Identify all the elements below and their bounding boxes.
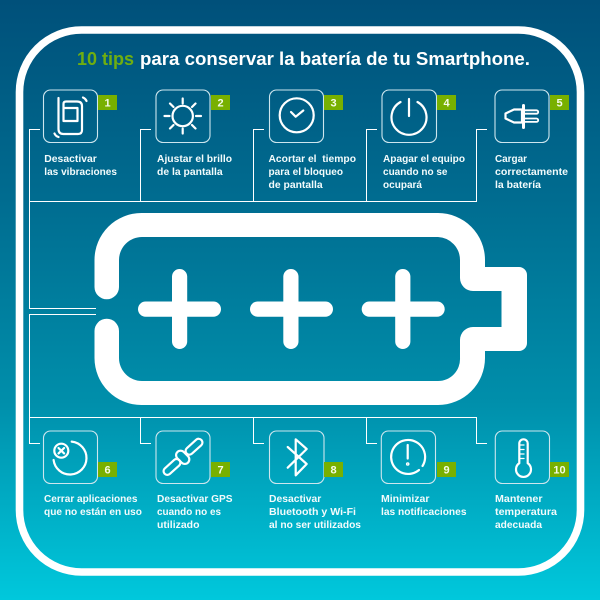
- tip 10: temperature: temperatura: [495, 506, 557, 518]
- tip 3: screen lock time: para el bloqueo: [268, 166, 343, 178]
- tip 10: temperature: 10: [553, 464, 566, 476]
- tip 3: screen lock time: de pantalla: [268, 179, 323, 191]
- tip 8: Bluetooth and Wi-Fi: Desactivar: [269, 493, 321, 505]
- icon: sun: [164, 98, 201, 134]
- tip 5: charging: correctamente: [495, 166, 568, 178]
- tip 5: charging: [495, 90, 569, 191]
- icon: plug: [506, 106, 538, 128]
- tip 2: brightness: de la pantalla: [157, 166, 223, 178]
- icon: chain link: [162, 437, 204, 476]
- tip 7: GPS: Desactivar GPS: [157, 493, 232, 505]
- tip 2: brightness: 2: [217, 98, 224, 110]
- tip 9: notifications: Minimizar: [381, 493, 430, 505]
- tip 2: brightness: Ajustar el brillo: [157, 153, 232, 165]
- icon: clock: [280, 98, 314, 132]
- icon: vibrating phone: [54, 98, 86, 137]
- tip 4: power off: Apagar el equipo: [383, 153, 465, 165]
- connector lines: top row: [30, 130, 487, 308]
- tip 9: notifications: [381, 431, 467, 518]
- tip 7: GPS: utilizado: [157, 519, 200, 531]
- tip 1: vibrations: las vibraciones: [44, 166, 117, 178]
- tip 7: GPS: [156, 431, 232, 531]
- tip 7: GPS: 7: [217, 464, 224, 476]
- tip 9: notifications: las notificaciones: [381, 506, 467, 518]
- tip 4: power off: ocupará: [383, 179, 422, 191]
- tip 3: screen lock time: [268, 90, 356, 191]
- tip 10: temperature: [495, 431, 569, 531]
- tip 6: close apps: Cerrar aplicaciones: [44, 493, 138, 505]
- tip 5: charging: la batería: [495, 179, 541, 191]
- tip 8: Bluetooth and Wi-Fi: al no ser utilizados: [269, 519, 361, 531]
- tip 8: Bluetooth and Wi-Fi: [269, 431, 361, 531]
- tip 5: charging: 5: [556, 98, 563, 110]
- tip 6: close apps: [44, 431, 142, 518]
- battery plus signs: [138, 269, 445, 349]
- icon: circle with x: [54, 442, 86, 475]
- tip 6: close apps: que no están en uso: [44, 506, 142, 518]
- tip 10: temperature: adecuada: [495, 519, 542, 531]
- tip 3: screen lock time: Acortar el tiempo: [268, 153, 356, 165]
- battery outline: [94, 213, 527, 405]
- tip 1: vibrations: [44, 90, 117, 178]
- tip 1: vibrations: Desactivar: [44, 153, 97, 165]
- tip 4: power off: [382, 90, 465, 191]
- tip 3: screen lock time: 3: [330, 98, 337, 110]
- tip 8: Bluetooth and Wi-Fi: 8: [330, 464, 337, 476]
- tip 2: brightness: [156, 90, 232, 178]
- tip 4: power off: cuando no se: [383, 166, 448, 178]
- tip 4: power off: 4: [443, 98, 450, 110]
- tip 10: temperature: Mantener: [495, 493, 542, 505]
- tip 1: vibrations: 1: [104, 98, 111, 110]
- icon: thermometer: [516, 439, 531, 477]
- icon: bluetooth: [288, 439, 307, 475]
- icon: exclamation circle: [391, 440, 425, 474]
- title: para conservar la batería de tu Smartphone.: [140, 48, 530, 69]
- icon: power: [392, 99, 427, 135]
- tip 5: charging: Cargar: [495, 153, 527, 165]
- tip 7: GPS: cuando no es: [157, 506, 221, 518]
- connector lines: bottom row: [30, 314, 487, 444]
- tip 9: notifications: 9: [443, 464, 450, 476]
- tip 6: close apps: 6: [104, 464, 111, 476]
- title: 10 tips: [77, 48, 134, 69]
- tip 8: Bluetooth and Wi-Fi: Bluetooth y Wi-Fi: [269, 506, 356, 518]
